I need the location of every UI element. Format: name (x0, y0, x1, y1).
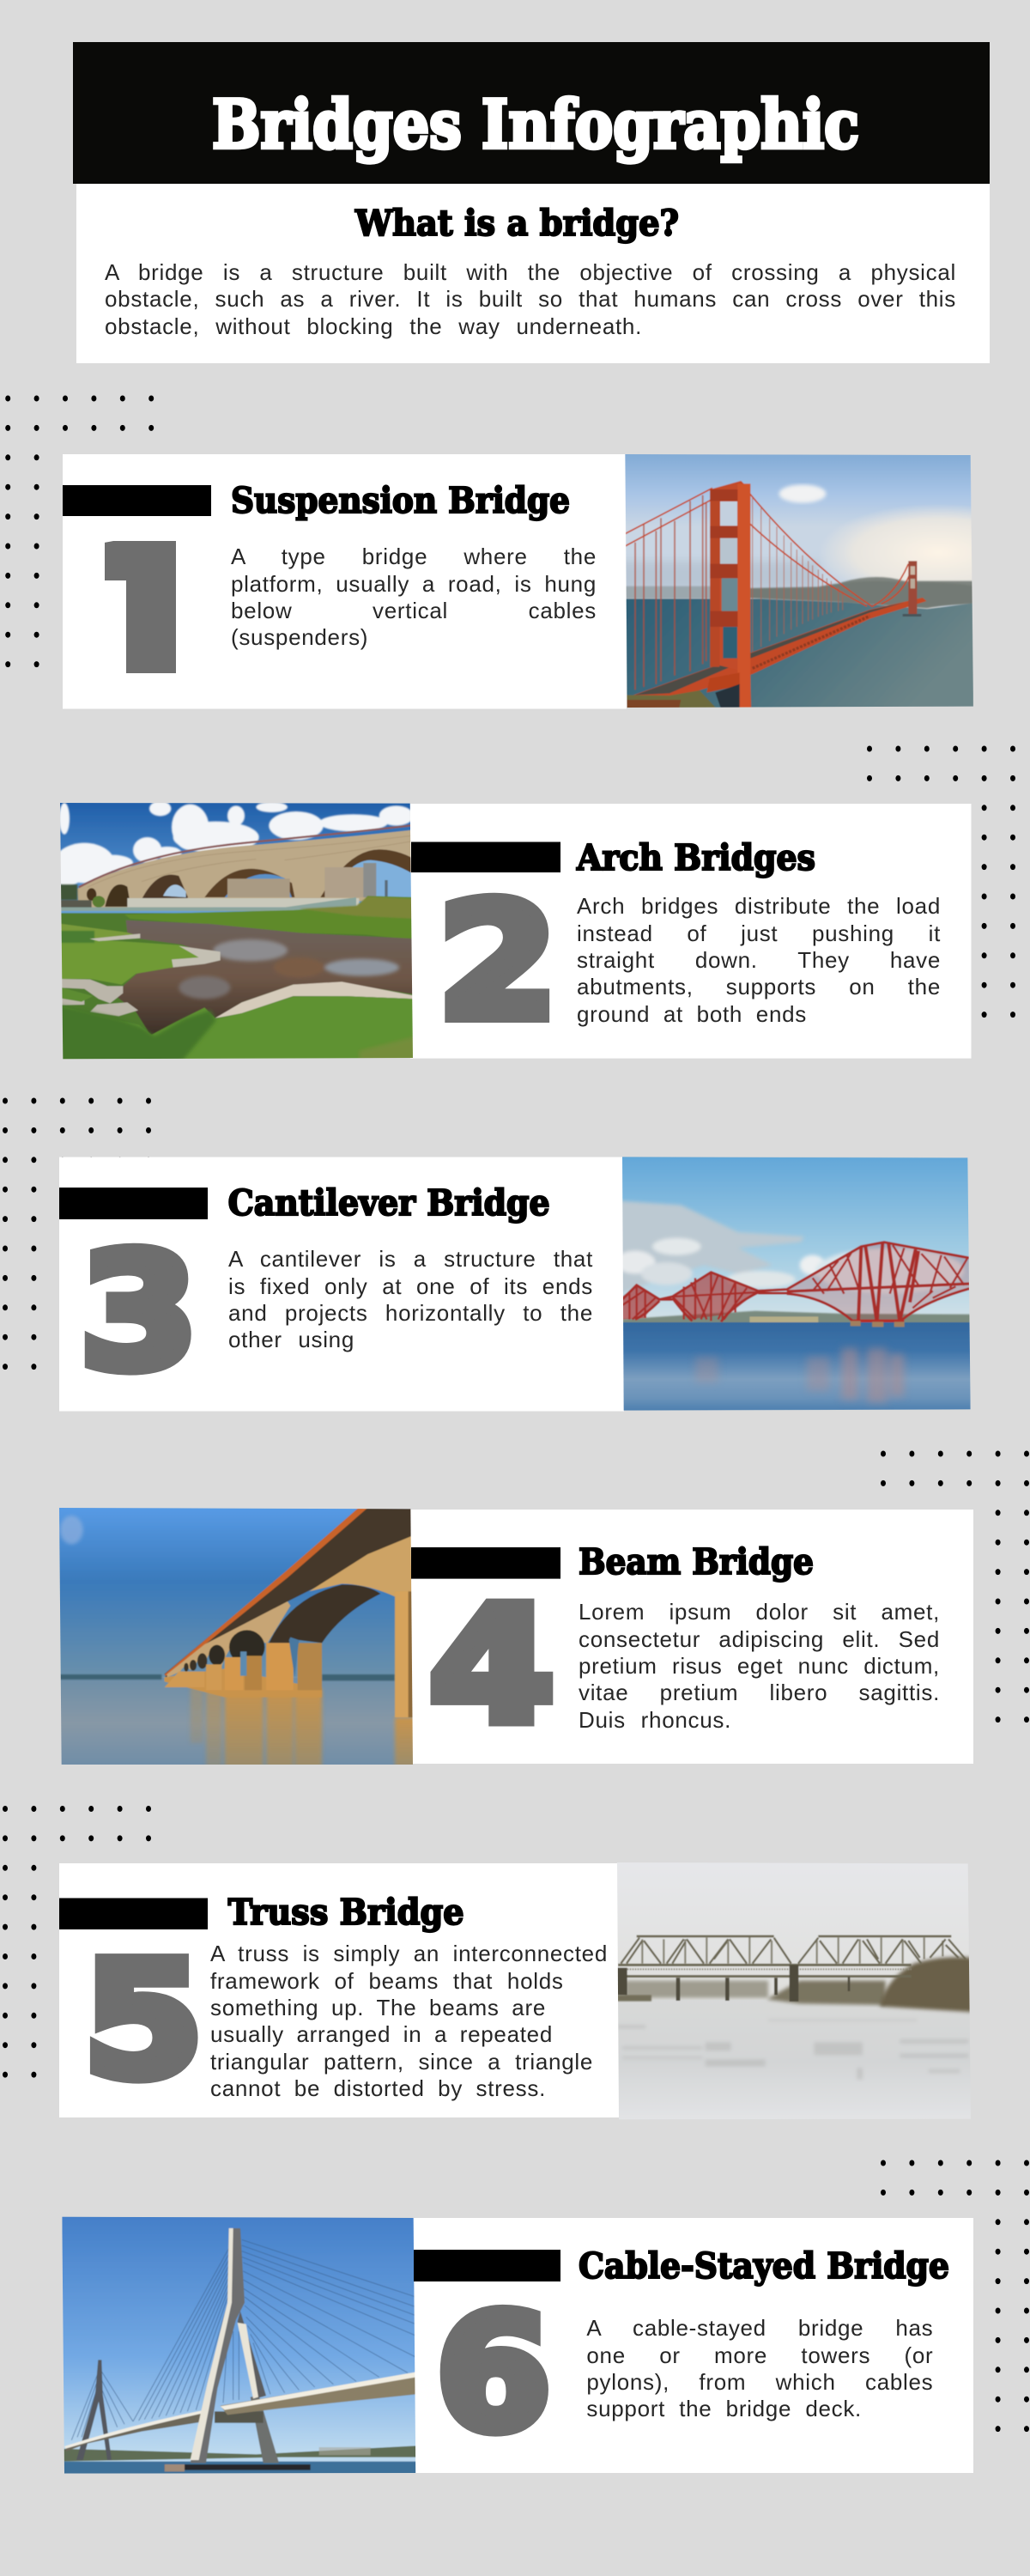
dot pattern: upper left (5, 395, 154, 667)
description: arch bridges (577, 893, 941, 1029)
heading: suspension bridge: Suspension Bridge (231, 480, 570, 521)
panel: suspension bridge (63, 454, 973, 709)
photo: stone arch bridge (60, 803, 413, 1060)
description: arch bridges: abutments, supports on the (577, 974, 941, 999)
photo: golden gate suspension bridge (625, 454, 973, 708)
description: arch bridges: straight down. They have (577, 947, 941, 973)
panel: beam bridge (56, 1503, 973, 1769)
card background (59, 1157, 624, 1412)
description: arch bridges: instead of just pushing it (577, 920, 941, 946)
description: truss bridge: framework of beams that holds (210, 1968, 564, 1994)
description: cable-stayed bridge: A cable-stayed bridge has (586, 2315, 933, 2341)
card background (413, 2218, 973, 2473)
description: truss bridge: A truss is simply an interconnected (210, 1941, 608, 1966)
number 3: 3 (80, 1219, 198, 1405)
description: cantilever bridge (228, 1246, 593, 1354)
description: suspension bridge: (suspenders) (231, 624, 368, 650)
intro text (105, 259, 956, 342)
description: truss bridge (210, 1941, 614, 2104)
description: arch bridges: Arch bridges distribute the load (577, 893, 941, 919)
panel: arch bridges (53, 799, 972, 1065)
description: beam bridge: vitae pretium libero sagittis. (579, 1680, 940, 1705)
description: beam bridge: consectetur adipiscing elit. Sed (579, 1626, 940, 1652)
heading: beam bridge: Beam Bridge (579, 1541, 814, 1583)
description: cable-stayed bridge: support the bridge deck. (586, 2396, 862, 2421)
card background (63, 454, 627, 709)
dot pattern: right of beam card (881, 1451, 1029, 1722)
description: beam bridge: Duis rhoncus. (579, 1707, 731, 1733)
description: suspension bridge: A type bridge where the (231, 544, 597, 569)
panel: truss bridge (59, 1859, 974, 2125)
panel: cantilever bridge (59, 1151, 978, 1417)
description: suspension bridge: below vertical cables (231, 598, 597, 623)
title: Bridges Infographic (212, 86, 859, 164)
description: beam bridge: Lorem ipsum dolor sit amet, (579, 1599, 940, 1625)
dot pattern: right of arch card (867, 745, 1015, 1018)
description: arch bridges: ground at both ends (577, 1001, 807, 1027)
description: cable-stayed bridge (586, 2315, 933, 2423)
description: cantilever bridge: and projects horizontally to the (228, 1300, 593, 1326)
card background (410, 804, 972, 1059)
description: cable-stayed bridge: one or more towers (or (586, 2342, 933, 2368)
intro text: obstacle, such as a river. It is built so that humans can cross over this (105, 286, 956, 312)
card background (59, 1863, 619, 2117)
title banner (73, 42, 990, 184)
black label bar (63, 485, 211, 516)
description: truss bridge: cannot be distorted by stress. (210, 2075, 546, 2101)
intro card background (76, 184, 990, 363)
black label bar (411, 841, 560, 872)
dot pattern: left of cantilever card (3, 1097, 151, 1370)
description: cantilever bridge: is fixed only at one of its ends (228, 1273, 593, 1299)
heading: arch bridges: Arch Bridges (576, 837, 815, 878)
number 4: 4 (429, 1573, 554, 1759)
description: beam bridge (579, 1599, 940, 1735)
card background (410, 1510, 973, 1764)
description: cantilever bridge: other using (228, 1327, 354, 1352)
description: cable-stayed bridge: pylons), from which cables (586, 2369, 933, 2395)
panel: cable-stayed bridge (56, 2211, 973, 2477)
description: beam bridge: pretium risus eget nunc dictum, (579, 1653, 940, 1679)
photo: truss bridge over river (617, 1862, 971, 2119)
number 5: 5 (83, 1928, 203, 2113)
heading: truss bridge: Truss Bridge (228, 1892, 464, 1933)
description: truss bridge: something up. The beams are (210, 1995, 546, 2020)
dot pattern: right of cable-stayed card (881, 2160, 1029, 2432)
black label bar (59, 1898, 208, 1929)
description: cantilever bridge: A cantilever is a structure that (228, 1246, 593, 1272)
heading: cable-stayed bridge: Cable-Stayed Bridge (579, 2245, 949, 2287)
intro text: obstacle, without blocking the way underneath. (105, 313, 642, 339)
number 6: 6 (436, 2281, 551, 2466)
photo: concrete beam bridge (59, 1508, 413, 1765)
description: truss bridge: usually arranged in a repeated (210, 2021, 553, 2047)
dot pattern: left of truss card (3, 1806, 151, 2078)
photo: forth cantilever bridge (622, 1157, 971, 1411)
intro text: A bridge is a structure built with the objective of crossing a physical (105, 259, 956, 285)
description: truss bridge: triangular pattern, since a triangle (210, 2049, 593, 2075)
black label bar (414, 2250, 560, 2281)
heading: cantilever bridge: Cantilever Bridge (228, 1182, 550, 1224)
panel: intro (73, 42, 990, 363)
description: suspension bridge: platform, usually a road, is hung (231, 571, 597, 597)
photo: cable-stayed bridge (62, 2217, 415, 2474)
heading: what is a bridge: What is a bridge? (354, 203, 679, 244)
description: suspension bridge (231, 544, 597, 652)
number 2: 2 (438, 869, 558, 1054)
black label bar (411, 1547, 560, 1579)
number 1: 1 (73, 510, 221, 735)
black label bar (59, 1188, 208, 1219)
